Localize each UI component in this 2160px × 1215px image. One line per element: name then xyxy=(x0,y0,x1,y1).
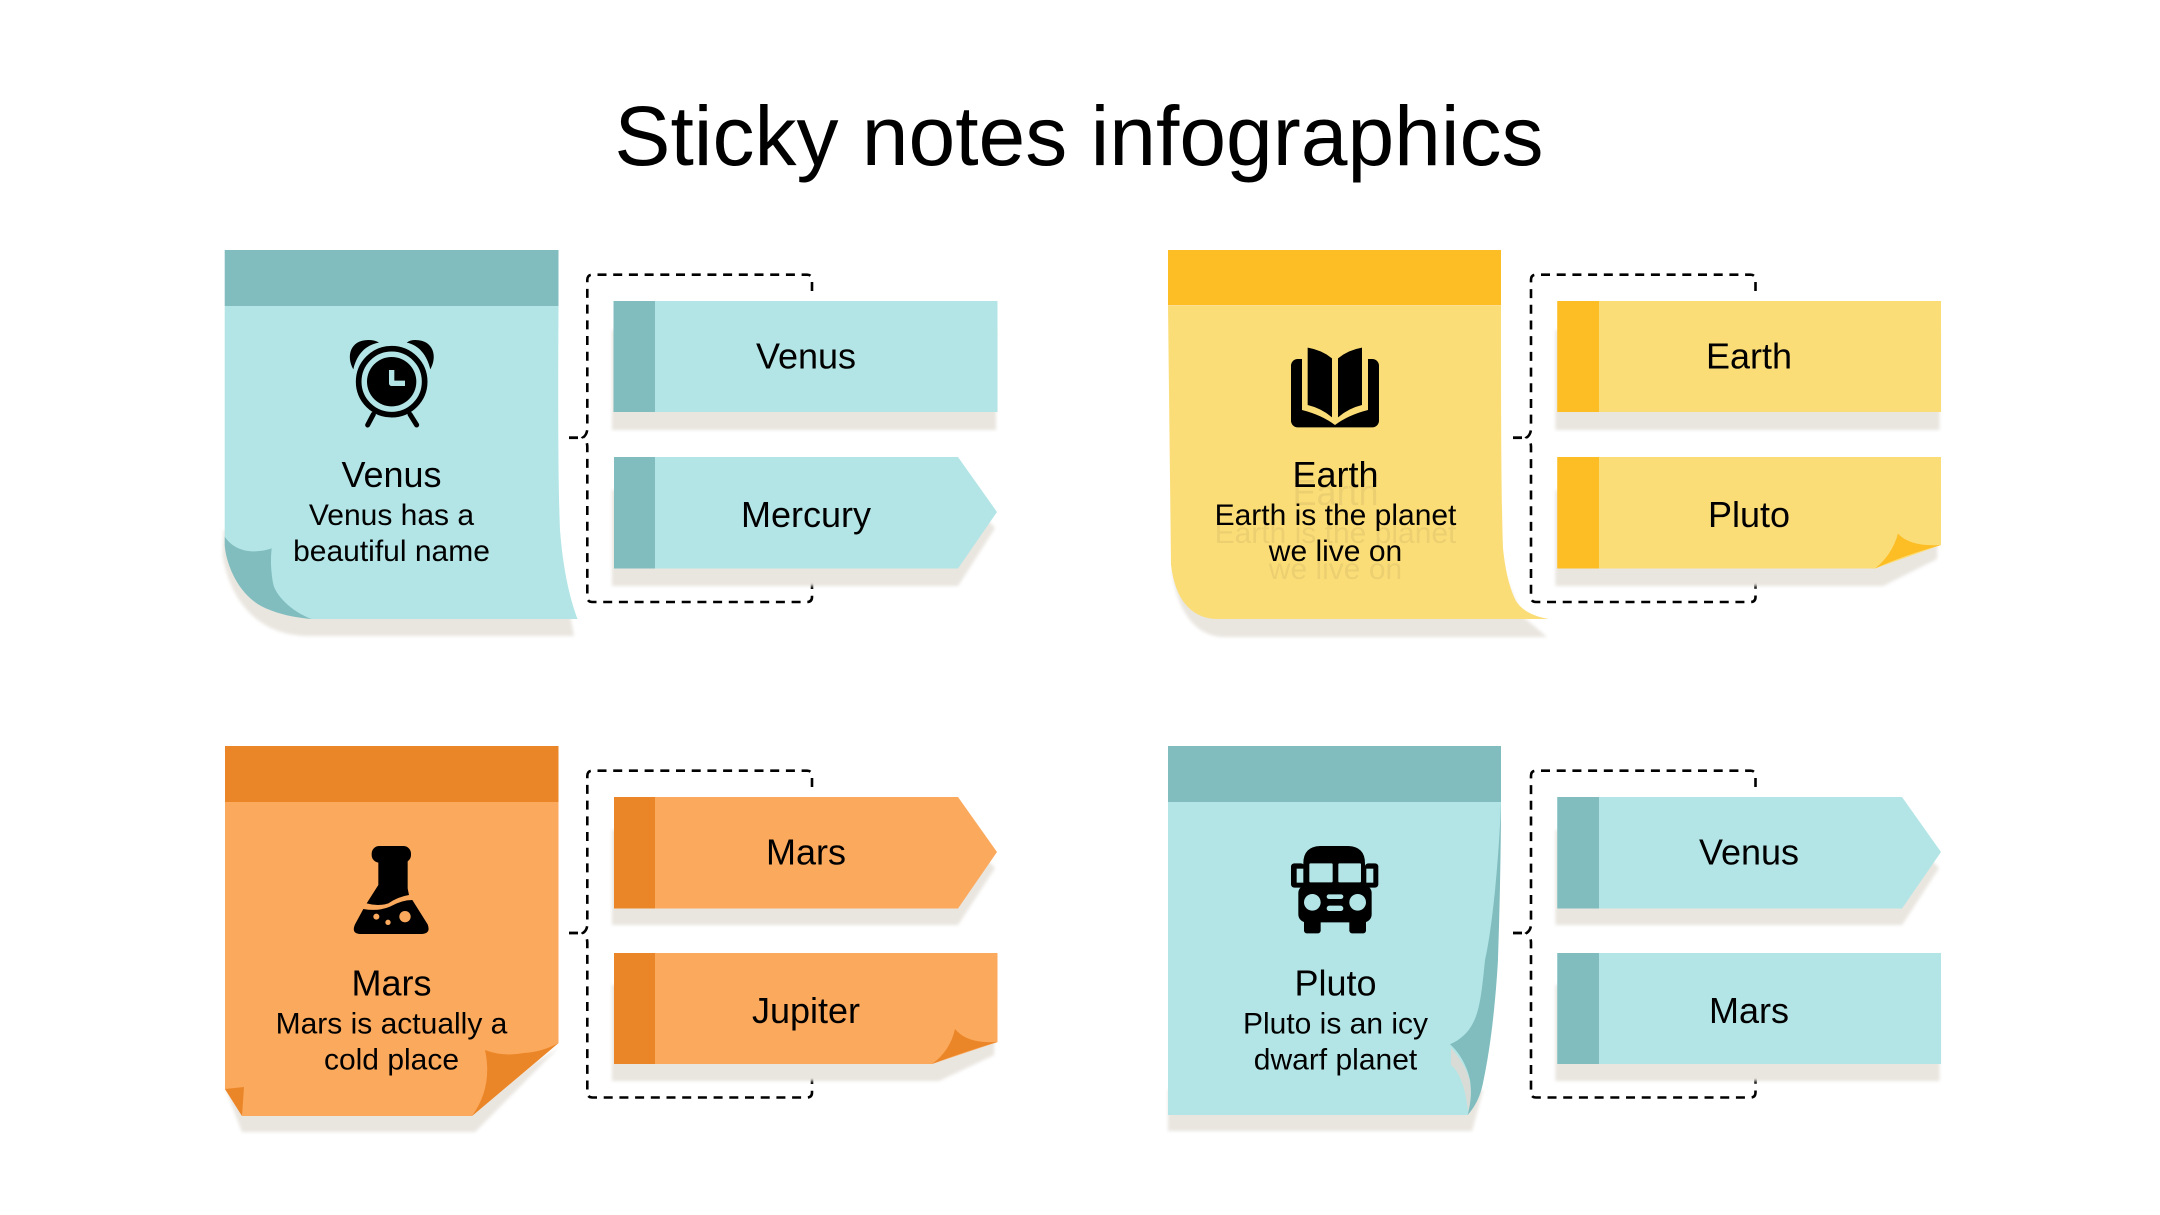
note description: Venus has a xyxy=(309,499,474,532)
sticky note: Venus xyxy=(223,250,577,636)
text reflection xyxy=(1215,472,1457,586)
note description: Mars is actually a xyxy=(276,1008,507,1040)
card: Venus xyxy=(1556,797,1941,925)
note heading: Mars xyxy=(352,962,432,1004)
icon: flask xyxy=(354,846,429,934)
card: Pluto: Pluto xyxy=(1708,494,1790,535)
card: Earth xyxy=(1556,301,1941,430)
text reflection: Earth is the planet xyxy=(1215,517,1456,550)
note description: Pluto is an icy xyxy=(1243,1008,1428,1040)
dashed connector xyxy=(1513,275,1756,602)
icon: bus xyxy=(1291,846,1378,933)
note heading: Venus xyxy=(341,454,442,495)
card: Venus: Venus xyxy=(1699,832,1799,872)
card: Mercury: Mercury xyxy=(741,494,871,535)
note description: dwarf planet xyxy=(1254,1044,1418,1076)
card: Mercury xyxy=(612,457,997,586)
note heading: Earth xyxy=(1292,454,1379,495)
text reflection: Earth xyxy=(1292,472,1379,513)
dashed connector xyxy=(569,275,812,602)
card: Pluto xyxy=(1556,457,1941,586)
panel: Earth xyxy=(1168,250,1941,637)
sticky note: Pluto xyxy=(1168,746,1501,1131)
panel: Pluto xyxy=(1168,746,1941,1131)
icon: open book xyxy=(1291,348,1379,427)
icon: alarm clock xyxy=(350,340,434,425)
title: Sticky notes infographics xyxy=(614,89,1544,183)
card: Jupiter xyxy=(612,953,998,1081)
card: Venus xyxy=(612,301,998,430)
card: Mars: Mars xyxy=(766,832,846,872)
card: Jupiter: Jupiter xyxy=(752,990,860,1031)
panel: Mars xyxy=(225,746,998,1132)
text reflection: we live on xyxy=(1268,553,1402,586)
sticky note: Mars xyxy=(225,746,558,1132)
card: Venus: Venus xyxy=(756,336,856,377)
card: Earth: Earth xyxy=(1706,336,1792,377)
panel: Venus xyxy=(223,250,997,636)
dashed connector xyxy=(1513,771,1756,1098)
note description: beautiful name xyxy=(293,535,490,568)
note heading: Pluto xyxy=(1294,962,1377,1004)
card: Mars: Mars xyxy=(1709,990,1789,1031)
sticky note: Earth xyxy=(1168,250,1549,637)
note description: Earth is the planet xyxy=(1215,499,1456,532)
note description: we live on xyxy=(1268,535,1402,568)
note description: cold place xyxy=(324,1044,459,1076)
card: Mars xyxy=(1556,953,1941,1081)
card: Mars xyxy=(612,797,997,925)
dashed connector xyxy=(569,771,812,1098)
